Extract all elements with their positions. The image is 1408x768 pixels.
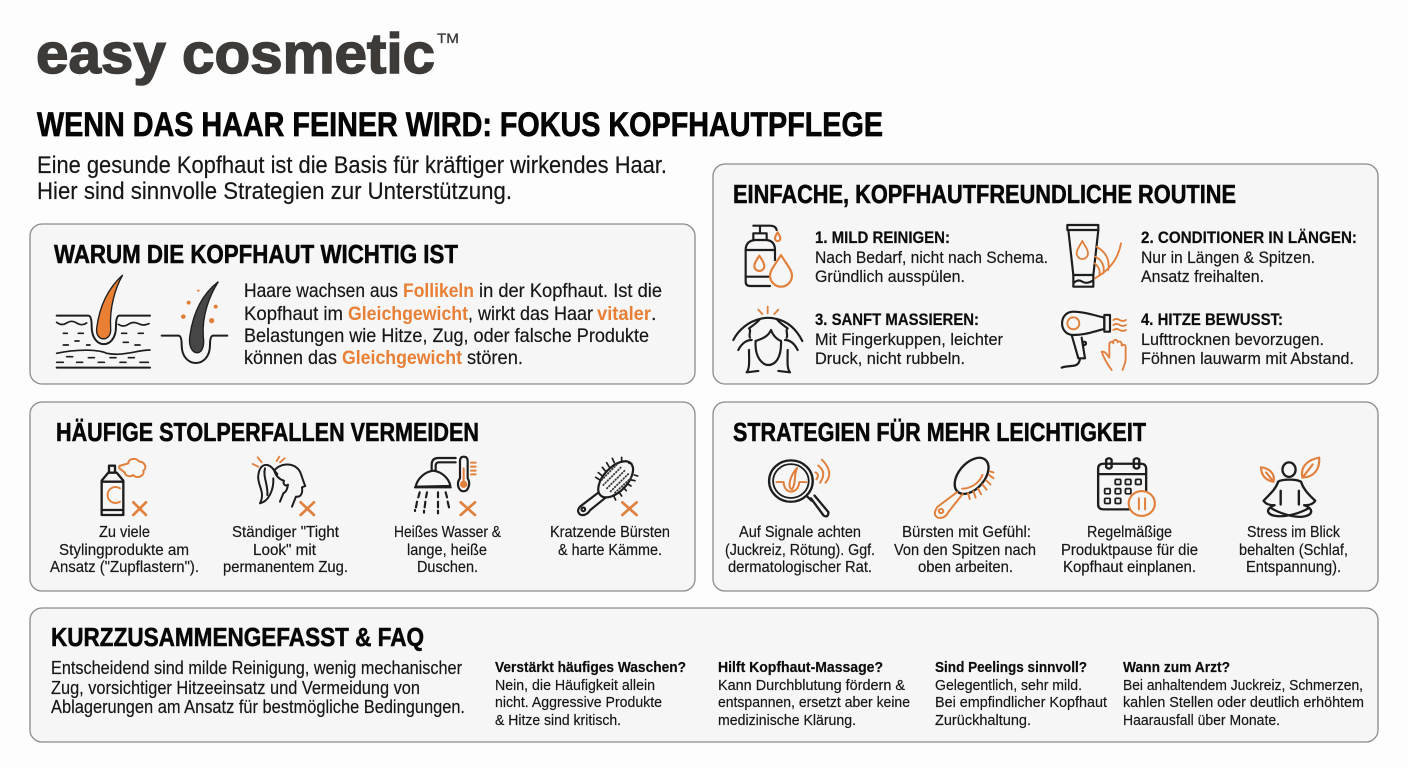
panel: strategien bbox=[713, 402, 1378, 591]
text: tight look: Look" mit bbox=[253, 542, 317, 559]
text: step 4 bbox=[1141, 310, 1354, 368]
faq: arzt bbox=[1123, 659, 1364, 729]
text: stylingprodukte: Stylingprodukte am bbox=[59, 542, 189, 559]
panel: warum die kopfhaut wichtig ist bbox=[30, 224, 695, 384]
heading: stolperfallen: HÄUFIGE STOLPERFALLEN VERMEIDEN bbox=[56, 417, 479, 447]
faq: massage: entspannen, ersetzt aber keine bbox=[718, 694, 910, 711]
heading: routine: EINFACHE, KOPFHAUTFREUNDLICHE ROUTINE bbox=[733, 179, 1236, 209]
text: follicle explanation: in der Kopfhaut. Ist die bbox=[479, 280, 662, 302]
faq: peelings bbox=[935, 659, 1108, 729]
text: step 1: Gründlich ausspülen. bbox=[815, 267, 965, 286]
text: summary bbox=[51, 658, 465, 717]
text: kratzende bürsten bbox=[550, 524, 670, 559]
faq: massage: Kann Durchblutung fördern & bbox=[718, 677, 905, 694]
faq: waschen: & Hitze sind kritisch. bbox=[495, 712, 621, 729]
text: heißes wasser: Duschen. bbox=[417, 559, 478, 576]
text: step 4: Lufttrocknen bevorzugen. bbox=[1141, 330, 1324, 349]
text: follicle explanation bbox=[244, 280, 662, 369]
faq: arzt: Bei anhaltendem Juckreiz, Schmerzen, bbox=[1123, 677, 1363, 694]
text: step 3: Druck, nicht rubbeln. bbox=[815, 349, 965, 368]
text: follicle explanation: , wirkt das Haar bbox=[468, 303, 593, 325]
faq: waschen: Nein, die Häufigkeit allein bbox=[495, 677, 655, 694]
faq: waschen: nicht. Aggressive Produkte bbox=[495, 694, 662, 711]
faq: arzt: Wann zum Arzt? bbox=[1123, 659, 1230, 676]
title: WENN DAS HAAR FEINER WIRD: FOKUS KOPFHAUTPFLEGE bbox=[37, 106, 883, 144]
intro text bbox=[37, 152, 667, 205]
faq: massage: medizinische Klärung. bbox=[718, 712, 856, 729]
text: bürsten: oben arbeiten. bbox=[918, 559, 1013, 576]
text: step 1 bbox=[815, 228, 1048, 286]
text: signale: dermatologischer Rat. bbox=[728, 559, 872, 576]
text: follicle explanation: Belastungen wie Hitze, Zug, oder falsche Produkte bbox=[244, 325, 649, 347]
faq: massage: Hilft Kopfhaut-Massage? bbox=[718, 659, 883, 676]
text: follicle explanation: Kopfhaut im bbox=[244, 303, 343, 325]
text: step 3: 3. SANFT MASSIEREN: bbox=[815, 310, 979, 329]
icon: healthy hair follicle in skin bbox=[57, 275, 150, 368]
faq: peelings: Bei empfindlicher Kopfhaut bbox=[935, 694, 1108, 711]
text: produktpause bbox=[1061, 524, 1198, 576]
text: produktpause: Produktpause für die bbox=[1061, 542, 1198, 559]
faq: waschen bbox=[495, 659, 686, 729]
text: follicle explanation: Gleichgewicht bbox=[342, 347, 462, 369]
text: stylingprodukte: Ansatz ("Zupflastern"). bbox=[50, 559, 199, 576]
text: bürsten bbox=[894, 524, 1036, 576]
text: stress: Stress im Blick bbox=[1247, 524, 1340, 541]
text: produktpause: Regelmäßige bbox=[1087, 524, 1172, 541]
faq: peelings: Sind Peelings sinnvoll? bbox=[935, 659, 1087, 676]
faq: arzt: Haarausfall über Monate. bbox=[1123, 712, 1280, 729]
icon: meditating person with leaves bbox=[1261, 458, 1319, 517]
icon: gentle orange brush bbox=[935, 452, 995, 518]
icon: spray can with cross bbox=[102, 459, 146, 515]
text: follicle explanation: Gleichgewicht bbox=[348, 303, 468, 325]
text: step 4: Föhnen lauwarm mit Abstand. bbox=[1141, 349, 1354, 368]
text: step 1: Nach Bedarf, nicht nach Schema. bbox=[815, 248, 1048, 267]
text: kratzende bürsten: & harte Kämme. bbox=[558, 542, 662, 559]
icon: magnifier on scalp bbox=[769, 460, 829, 516]
text: stylingprodukte bbox=[50, 524, 199, 576]
text: heißes wasser bbox=[394, 524, 502, 576]
text: step 2: Ansatz freihalten. bbox=[1141, 267, 1264, 286]
brand logo: TM bbox=[437, 30, 459, 46]
text: follicle explanation: Haare wachsen aus bbox=[244, 280, 398, 302]
text: stress: behalten (Schlaf, bbox=[1239, 542, 1348, 559]
text: tight look bbox=[223, 524, 348, 576]
brand logo: easy cosmetic bbox=[36, 22, 435, 86]
icon: scratchy brush with cross bbox=[578, 455, 639, 515]
text: summary: Entscheidend sind milde Reinigung, wenig mechanischer bbox=[51, 658, 462, 678]
text: follicle explanation: . bbox=[651, 303, 656, 325]
text: step 3 bbox=[815, 310, 1003, 368]
heading: faq: KURZZUSAMMENGEFASST & FAQ bbox=[51, 622, 424, 652]
icon: head massage bbox=[733, 307, 802, 372]
text: signale: Auf Signale achten bbox=[739, 524, 861, 541]
heading: strategien: STRATEGIEN FÜR MEHR LEICHTIGKEIT bbox=[733, 417, 1146, 447]
text: step 2: 2. CONDITIONER IN LÄNGEN: bbox=[1141, 228, 1357, 247]
text: step 2 bbox=[1141, 228, 1357, 286]
icon: stressed hair follicle bbox=[162, 282, 227, 363]
text: follicle explanation: stören. bbox=[467, 347, 523, 369]
text: summary: Zug, vorsichtiger Hitzeeinsatz und Vermeidung von bbox=[51, 678, 420, 698]
icon: tight ponytail with cross bbox=[253, 457, 314, 515]
text: signale: (Juckreiz, Rötung). Ggf. bbox=[725, 542, 875, 559]
text: bürsten: Bürsten mit Gefühl: bbox=[902, 524, 1031, 541]
heading: warum: WARUM DIE KOPFHAUT WICHTIG IST bbox=[54, 239, 458, 269]
text: summary: Ablagerungen am Ansatz für bestmögliche Bedingungen. bbox=[51, 697, 465, 717]
faq: massage bbox=[718, 659, 910, 729]
panel: einfache routine bbox=[713, 164, 1378, 384]
icon: calendar with pause bbox=[1098, 458, 1155, 516]
text: produktpause: Kopfhaut einplanen. bbox=[1063, 559, 1196, 576]
text: heißes wasser: Heißes Wasser & bbox=[394, 524, 502, 541]
icon: hair dryer and hand bbox=[1062, 312, 1126, 370]
text: kratzende bürsten: Kratzende Bürsten bbox=[550, 524, 670, 541]
text: follicle explanation: können das bbox=[244, 347, 337, 369]
faq: peelings: Zurückhaltung. bbox=[935, 712, 1031, 729]
text: follicle explanation: Follikeln bbox=[403, 280, 474, 302]
text: step 4: 4. HITZE BEWUSST: bbox=[1141, 310, 1283, 329]
faq: peelings: Gelegentlich, sehr mild. bbox=[935, 677, 1082, 694]
text: stylingprodukte: Zu viele bbox=[99, 524, 150, 541]
text: bürsten: Von den Spitzen nach bbox=[894, 542, 1036, 559]
text: signale bbox=[725, 524, 875, 576]
icon: pump bottle with drops bbox=[746, 226, 792, 287]
text: tight look: permanentem Zug. bbox=[223, 559, 348, 576]
text: tight look: Ständiger "Tight bbox=[232, 524, 340, 541]
text: follicle explanation: vitaler bbox=[597, 303, 651, 325]
panel: stolperfallen bbox=[30, 402, 695, 591]
text: stress: Entspannung). bbox=[1246, 559, 1341, 576]
text: heißes wasser: lange, heiße bbox=[407, 542, 487, 559]
text: stress bbox=[1239, 524, 1348, 576]
text: step 1: 1. MILD REINIGEN: bbox=[815, 228, 950, 247]
intro text: Eine gesunde Kopfhaut ist die Basis für kräftiger wirkendes Haar. bbox=[37, 152, 667, 179]
faq: arzt: kahlen Stellen oder deutlich erhöhtem bbox=[1123, 694, 1364, 711]
panel: kurzzusammengefasst und faq bbox=[30, 608, 1378, 742]
intro text: Hier sind sinnvolle Strategien zur Unterstützung. bbox=[37, 178, 512, 205]
text: step 2: Nur in Längen & Spitzen. bbox=[1141, 248, 1315, 267]
icon: conditioner tube with hair bbox=[1067, 225, 1121, 287]
text: step 3: Mit Fingerkuppen, leichter bbox=[815, 330, 1003, 349]
icon: hot shower with thermometer and cross bbox=[415, 457, 476, 515]
faq: waschen: Verstärkt häufiges Waschen? bbox=[495, 659, 686, 676]
